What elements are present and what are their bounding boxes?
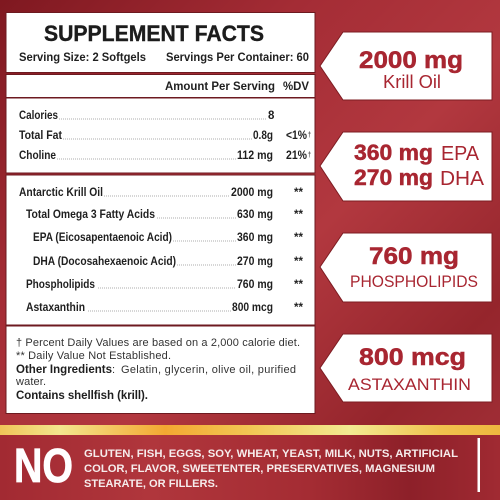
row: calories: Calories xyxy=(19,110,58,122)
row: total fat: 0.8g xyxy=(253,130,273,142)
callout: astaxanthin: ASTAXANTHIN xyxy=(348,375,471,394)
heading: SUPPLEMENT FACTS xyxy=(44,21,264,46)
row: calories xyxy=(19,110,275,122)
row: antarctic krill oil: ** xyxy=(294,187,304,199)
row: epa: 360 mg xyxy=(237,232,273,244)
callout: epa and dha: EPA xyxy=(441,143,480,165)
row: choline xyxy=(19,150,312,162)
panel section: active ingredients xyxy=(6,175,315,325)
row: choline: Choline xyxy=(19,150,56,162)
exclusions list xyxy=(84,448,458,490)
row: total omega 3: ** xyxy=(294,209,304,221)
row: epa xyxy=(33,232,304,244)
row: antarctic krill oil: Antarctic Krill Oil xyxy=(19,187,103,199)
row: total fat: † xyxy=(308,132,312,139)
servings per container: Servings Per Container: 60 xyxy=(166,52,309,64)
row: dha xyxy=(33,256,304,268)
callout: epa and dha: 360 mg xyxy=(354,140,433,165)
row: total omega 3: 630 mg xyxy=(237,209,273,221)
row: astaxanthin: ** xyxy=(294,302,304,314)
row: astaxanthin: 800 mcg xyxy=(232,302,273,314)
vertical divider xyxy=(478,438,480,492)
callout: krill oil xyxy=(320,32,492,100)
other ingredients: Gelatin, glycerin, olive oil, purified xyxy=(121,364,296,376)
row: dha: 270 mg xyxy=(237,256,273,268)
callout: astaxanthin: 800 mcg xyxy=(359,344,466,371)
row: total fat: <1% xyxy=(286,130,307,142)
exclusions list: STEARATE, OR FILLERS. xyxy=(84,478,218,490)
callout: krill oil: 2000 mg xyxy=(359,47,463,74)
amount per serving header: Amount Per Serving xyxy=(165,81,275,93)
row: choline: † xyxy=(308,152,312,159)
percent daily value header: %DV xyxy=(283,81,309,93)
callout: epa and dha: DHA xyxy=(440,168,485,190)
callout: krill oil: Krill Oil xyxy=(383,72,441,92)
row: total fat xyxy=(19,130,312,142)
exclusions list: GLUTEN, FISH, EGGS, SOY, WHEAT, YEAST, MILK, NUTS, ARTIFICIAL xyxy=(84,448,458,460)
gold band xyxy=(0,425,500,435)
exclusions list: COLOR, FLAVOR, SWEETENTER, PRESERVATIVES, MAGNESIUM xyxy=(84,463,435,475)
big no: NO xyxy=(14,440,73,493)
row: choline: 21% xyxy=(286,150,307,162)
other ingredients: Other Ingredients xyxy=(16,364,112,376)
panel: free-from banner xyxy=(0,435,500,500)
footnote: daily value not established: ** Daily Value Not Established. xyxy=(16,350,171,362)
panel section: title xyxy=(6,12,315,72)
row: dha: DHA (Docosahexaenoic Acid) xyxy=(33,256,176,268)
row: antarctic krill oil xyxy=(19,187,304,199)
allergen statement: Contains shellfish (krill). xyxy=(16,390,148,402)
panel section: footnotes xyxy=(6,326,315,414)
row: phospholipids: 760 mg xyxy=(237,279,273,291)
panel section: column headers xyxy=(6,74,315,98)
row: epa: EPA (Eicosapentaenoic Acid) xyxy=(33,232,172,244)
row: epa: ** xyxy=(294,232,304,244)
row: total omega 3 xyxy=(26,209,304,221)
callout: phospholipids: PHOSPHOLIPIDS xyxy=(350,272,478,291)
row: antarctic krill oil: 2000 mg xyxy=(231,187,273,199)
row: astaxanthin xyxy=(26,302,304,314)
row: dha: ** xyxy=(294,256,304,268)
panel: supplement facts xyxy=(6,12,315,414)
callout: phospholipids: 760 mg xyxy=(369,243,459,270)
other ingredients: water. xyxy=(15,376,46,388)
row: total fat: Total Fat xyxy=(19,130,62,142)
row: astaxanthin: Astaxanthin xyxy=(26,302,85,314)
row: calories: 8 xyxy=(268,110,275,122)
footnote: daily values: † Percent Daily Values are based on a 2,000 calorie diet. xyxy=(16,337,300,349)
callout: phospholipids xyxy=(320,233,492,302)
other ingredients: : xyxy=(112,364,115,376)
callout: epa and dha: 270 mg xyxy=(354,165,433,190)
panel section: calories and nutrients xyxy=(6,98,315,173)
row: phospholipids xyxy=(26,279,304,291)
other ingredients xyxy=(15,364,296,388)
row: phospholipids: ** xyxy=(294,279,304,291)
callout: astaxanthin xyxy=(320,334,492,402)
row: choline: 112 mg xyxy=(237,150,273,162)
row: total omega 3: Total Omega 3 Fatty Acids xyxy=(26,209,155,221)
serving size: Serving Size: 2 Softgels xyxy=(19,52,146,64)
row: phospholipids: Phospholipids xyxy=(26,279,95,291)
callout: epa and dha xyxy=(320,132,492,201)
